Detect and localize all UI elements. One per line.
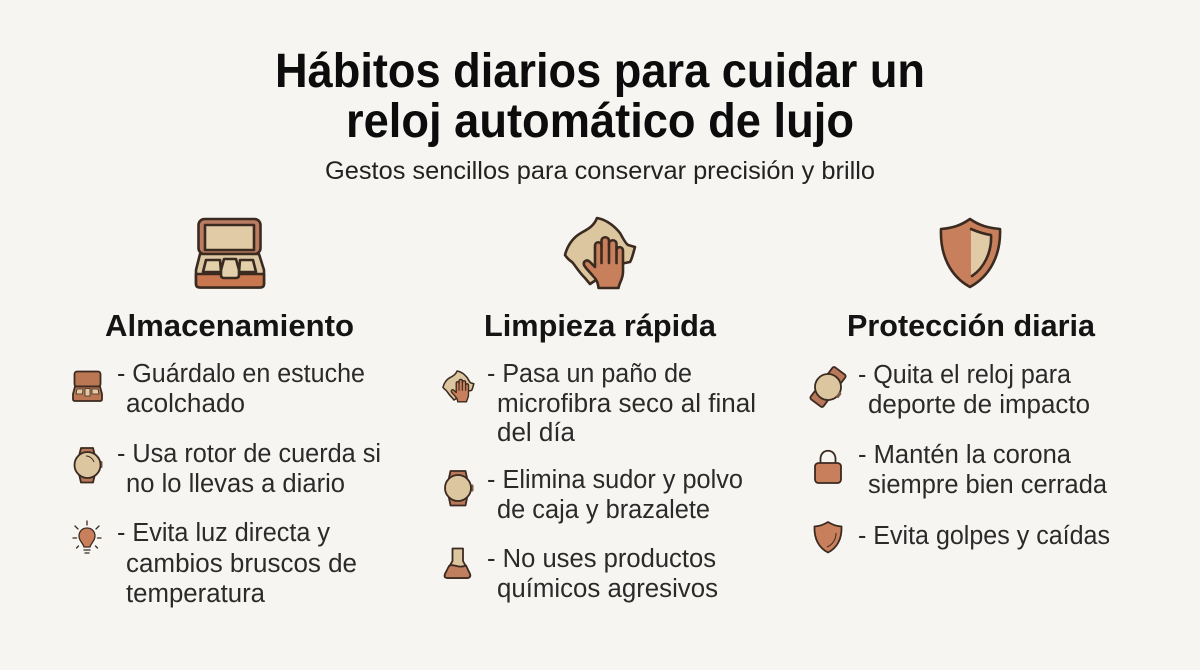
icon: watch bbox=[74, 448, 102, 482]
item: paño: - Pasa un paño de bbox=[487, 360, 692, 388]
item: deporte: - Quita el reloj para bbox=[858, 361, 1072, 389]
panel: protección diaria bbox=[806, 219, 1110, 552]
icon: watch bbox=[445, 471, 474, 506]
heading: almacenamiento: Almacenamiento bbox=[105, 308, 354, 343]
item: sudor: de caja y brazalete bbox=[497, 496, 710, 524]
heading: limpieza: Limpieza rápida bbox=[484, 308, 717, 343]
item: estuche bbox=[73, 360, 365, 418]
title bbox=[275, 45, 925, 148]
item: productos bbox=[445, 545, 718, 603]
icon: shield bbox=[941, 219, 1000, 287]
icon: hand with cloth bbox=[565, 218, 635, 288]
item: deporte bbox=[806, 361, 1090, 419]
panel: almacenamiento bbox=[73, 219, 381, 608]
icon: light bulb bbox=[73, 521, 101, 553]
item: golpes: - Evita golpes y caídas bbox=[858, 522, 1110, 550]
icon: open watch case bbox=[196, 219, 264, 288]
item: corona bbox=[815, 441, 1108, 499]
item: rotor: - Usa rotor de cuerda si bbox=[117, 440, 381, 468]
heading: protección: Protección diaria bbox=[847, 308, 1096, 343]
title: Hábitos diarios para cuidar un bbox=[275, 45, 925, 98]
title: reloj automático de lujo bbox=[346, 95, 854, 148]
item: corona: siempre bien cerrada bbox=[868, 471, 1108, 499]
item: productos: químicos agresivos bbox=[497, 575, 718, 603]
icon: small hand with cloth bbox=[443, 371, 474, 402]
icon: flask bbox=[445, 548, 470, 578]
panel: limpieza rápida bbox=[443, 218, 756, 603]
item: luz bbox=[73, 519, 357, 608]
item: rotor: no lo llevas a diario bbox=[126, 470, 345, 498]
icon: small shield bbox=[814, 522, 842, 552]
item: rotor bbox=[74, 440, 381, 498]
item: productos: - No uses productos bbox=[487, 545, 716, 573]
icon: padlock bbox=[815, 451, 841, 483]
item: paño: microfibra seco al final bbox=[497, 390, 756, 418]
item: estuche: - Guárdalo en estuche bbox=[117, 360, 365, 388]
subtitle: Gestos sencillos para conservar precisión y brillo bbox=[325, 157, 875, 185]
item: luz: - Evita luz directa y bbox=[117, 519, 330, 547]
item: luz: temperatura bbox=[126, 580, 266, 608]
item: sudor: - Elimina sudor y polvo bbox=[487, 466, 743, 494]
item: luz: cambios bruscos de bbox=[126, 550, 357, 578]
item: deporte: deporte de impacto bbox=[868, 391, 1090, 419]
icon: small case bbox=[73, 372, 102, 401]
item: estuche: acolchado bbox=[126, 390, 245, 418]
item: sudor bbox=[445, 466, 743, 524]
item: paño bbox=[443, 360, 756, 447]
icon: tilted watch bbox=[806, 363, 852, 412]
item: corona: - Mantén la corona bbox=[858, 441, 1072, 469]
item: paño: del día bbox=[497, 419, 576, 447]
